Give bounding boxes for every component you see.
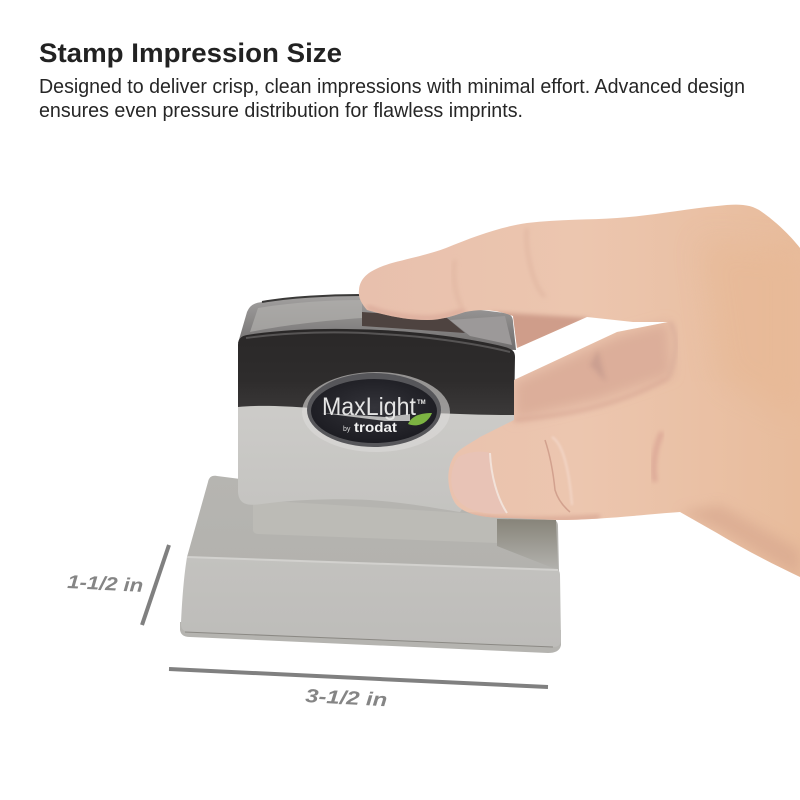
hand	[359, 205, 800, 577]
hand shading	[493, 310, 586, 348]
title: Stamp Impression Size	[39, 38, 342, 68]
icon: leaf	[408, 413, 432, 425]
badge	[307, 373, 441, 447]
knuckle mark	[654, 432, 662, 482]
height label: 1-1/2 in	[67, 572, 144, 597]
dimension: width	[169, 669, 548, 711]
description text	[39, 76, 745, 122]
dimension: height	[67, 545, 169, 625]
badge byline: by	[343, 426, 351, 433]
height line	[142, 545, 169, 625]
clear top cap	[238, 295, 516, 350]
thumbnail	[451, 452, 507, 514]
base top face	[187, 476, 559, 572]
stamp body	[238, 295, 516, 512]
width label: 3-1/2 in	[305, 686, 388, 711]
description text: Designed to deliver crisp, clean impressions with minimal effort. Advanced design	[39, 76, 745, 98]
badge: TM	[417, 400, 426, 406]
description text: ensures even pressure distribution for flawless imprints.	[39, 100, 523, 122]
base front face	[181, 557, 561, 647]
badge: trodat	[354, 419, 397, 435]
badge wordmark: MaxLight	[322, 393, 416, 421]
width line	[169, 669, 548, 687]
stamp neck	[253, 500, 497, 543]
badge surround	[302, 372, 450, 452]
grey lower body	[238, 400, 514, 512]
base lip	[180, 622, 561, 653]
infographic canvas	[40, 42, 800, 706]
stamp base	[180, 476, 561, 653]
neck shadow on base	[497, 519, 558, 570]
thumb joint creases	[545, 440, 570, 512]
black upper band	[238, 329, 515, 415]
